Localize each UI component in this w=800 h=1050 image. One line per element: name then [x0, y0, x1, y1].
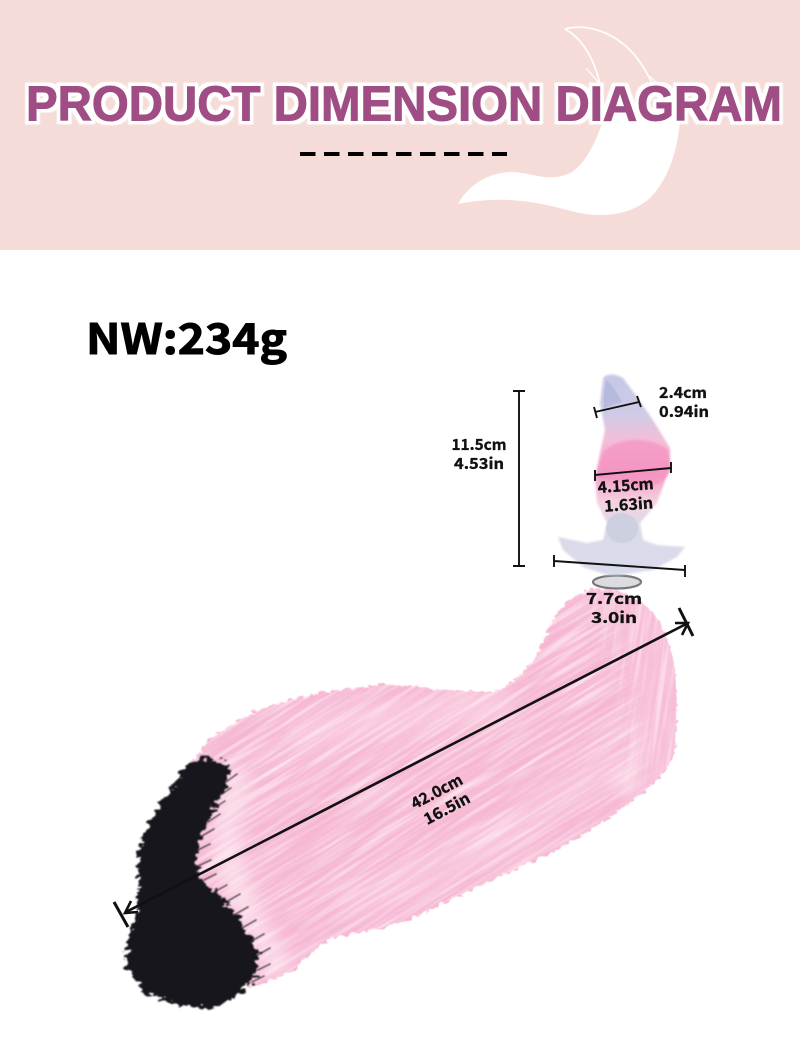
fur light areas [208, 689, 646, 980]
title: PRODUCT DIMENSION DIAGRAM [26, 78, 782, 132]
flange label: 7.7cm [586, 587, 642, 609]
fur strands: upper tail [584, 590, 676, 790]
icon: white fox silhouette [458, 27, 680, 215]
body highlight [604, 380, 622, 408]
height bracket [513, 391, 525, 566]
dark hair strands over pink [198, 774, 270, 982]
product: silicone body with flange [558, 375, 685, 588]
body bracket [595, 462, 671, 481]
header banner [0, 0, 800, 250]
tail label inches: 16.5in [419, 787, 474, 830]
fur strands: lower body [191, 590, 644, 986]
body label inches: 1.63in [603, 491, 654, 517]
tail black tip [127, 759, 259, 1008]
measurement: tip width [594, 381, 709, 422]
flange bracket [554, 555, 685, 577]
tip label inches: 0.94in [659, 400, 709, 422]
tip bracket [594, 396, 641, 418]
tail fur texture [191, 590, 676, 986]
measurement: body width [595, 462, 671, 517]
arrow: tail length [114, 608, 693, 927]
dashed divider under title [300, 152, 507, 156]
net weight label: NW:234g [86, 306, 287, 367]
pink marbling [597, 440, 671, 487]
measurement: flange width [554, 555, 685, 628]
measurement: tail length [114, 608, 693, 927]
body label: 4.15cm [597, 472, 654, 498]
height label: 11.5cm [452, 433, 506, 455]
height label inches: 4.53in [454, 452, 504, 474]
flange label inches: 3.0in [591, 606, 637, 628]
metal ring [593, 576, 641, 588]
tail pink silhouette [160, 590, 676, 987]
tail label: 42.0cm [407, 768, 466, 814]
translucent body [558, 375, 685, 575]
measurement: overall height [452, 391, 525, 566]
product: faux fur tail [122, 587, 679, 1011]
tip label: 2.4cm [659, 381, 707, 403]
banner background [0, 0, 800, 250]
neck detail [606, 513, 638, 543]
